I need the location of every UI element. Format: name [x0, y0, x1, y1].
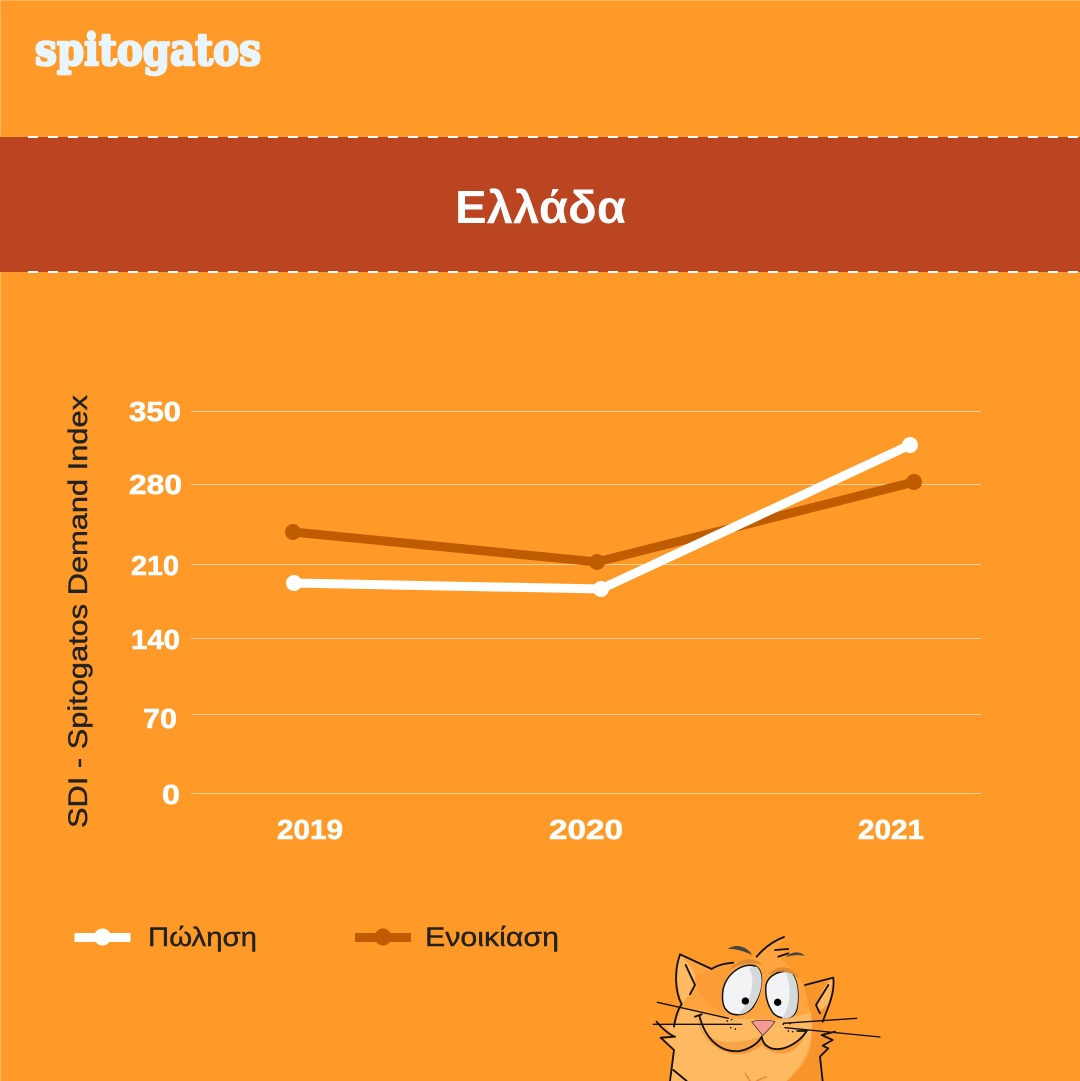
legend: rent: [355, 922, 559, 952]
x-axis labels: 2019: [277, 814, 343, 845]
whisker dots: [726, 1019, 793, 1032]
y-axis title: SDI - Spitogatos Demand Index: [63, 394, 93, 828]
light: lower face: [665, 1007, 812, 1081]
line chart: [63, 394, 981, 845]
y-axis labels: 70: [143, 703, 177, 734]
series: rent: [285, 474, 922, 570]
outline: [657, 937, 835, 1081]
head base: [657, 937, 835, 1081]
shade: left forehead: [695, 963, 735, 1012]
y-axis labels: 140: [131, 624, 180, 655]
y-axis labels: 350: [129, 396, 181, 427]
x-axis labels: 2020: [549, 814, 623, 845]
eyes: [722, 965, 798, 1019]
legend: sale: Πώληση: [148, 922, 257, 952]
shade: smile: [696, 1016, 807, 1054]
nose: [752, 1020, 775, 1036]
y-axis labels: 0: [162, 779, 180, 810]
title banner: [0, 137, 1080, 272]
legend: rent: Ενοικίαση: [425, 922, 559, 952]
legend: [74, 922, 559, 952]
heading: Ελλάδα: [455, 181, 626, 233]
legend: sale: [74, 922, 257, 952]
logo: spitogatos: spitogatos: [35, 25, 261, 76]
y-axis labels: 210: [131, 550, 179, 581]
shade: right side: [783, 980, 833, 1081]
brows and tuft: [727, 946, 805, 978]
icon: cat mascot: [653, 937, 880, 1081]
x-axis labels: 2021: [858, 814, 924, 845]
fur ticks: [745, 1073, 766, 1081]
y-axis labels: 280: [129, 469, 182, 500]
whiskers: [653, 1002, 880, 1037]
y-axis labels: [129, 396, 182, 810]
series: sale: [286, 437, 918, 597]
light: ears: [678, 956, 695, 1003]
x-axis labels: [277, 814, 924, 845]
